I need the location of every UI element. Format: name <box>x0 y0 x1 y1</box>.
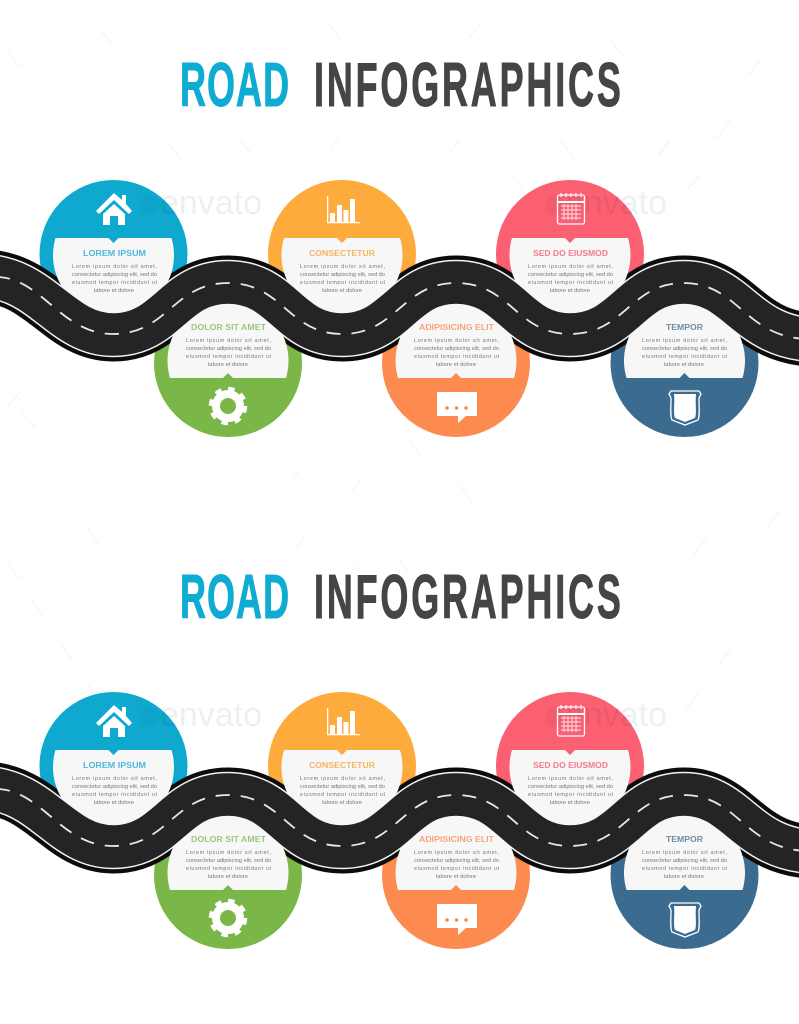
text block: consectetur <box>300 264 386 294</box>
title <box>180 562 621 631</box>
text block: dolor sit amet: Lorem ipsum dolor sit amet, <box>186 850 272 856</box>
text block: adipisicing elit: eiusmod tempor incididunt ut <box>414 866 500 872</box>
panel: consectetur card <box>281 708 402 828</box>
text block: adipisicing elit: eiusmod tempor incididunt ut <box>414 354 500 360</box>
text block: lorem ipsum: Lorem ipsum dolor sit amet, <box>72 776 158 782</box>
watermark: envato <box>160 696 262 734</box>
panel: sed do eiusmod card <box>510 193 630 316</box>
text block: tempor: labore et dolore <box>664 874 704 880</box>
infographic block 2 <box>0 562 799 949</box>
watermark: envato <box>565 184 667 222</box>
watermark: envato <box>160 184 262 222</box>
text block: tempor <box>642 338 728 368</box>
panel: lorem ipsum card <box>53 193 174 316</box>
text block: sed do eiusmod: Lorem ipsum dolor sit amet, <box>528 776 614 782</box>
text block: tempor: Lorem ipsum dolor sit amet, <box>642 850 728 856</box>
icon: gear <box>211 389 245 423</box>
infographic block 1 <box>0 50 799 437</box>
heading: sed do eiusmod: SED DO EIUSMOD <box>533 248 608 258</box>
text block: sed do eiusmod: eiusmod tempor incididunt ut <box>528 280 614 286</box>
text block: lorem ipsum <box>72 264 158 294</box>
title: ROAD <box>180 50 289 119</box>
text block: sed do eiusmod <box>528 776 614 806</box>
title: ROAD <box>180 562 289 631</box>
text block: lorem ipsum: consectetur adipiscing elit, sed do <box>72 784 157 790</box>
text block: consectetur: labore et dolore <box>322 288 362 294</box>
text block: lorem ipsum: Lorem ipsum dolor sit amet, <box>72 264 158 270</box>
text block: sed do eiusmod: consectetur adipiscing elit, sed do <box>528 784 613 790</box>
text block: sed do eiusmod: labore et dolore <box>550 800 590 806</box>
icon: calendar <box>558 193 584 224</box>
text block: sed do eiusmod: eiusmod tempor incididunt ut <box>528 792 614 798</box>
panel: dolor sit amet card <box>167 300 288 423</box>
panel: adipisicing elit card <box>396 812 516 935</box>
heading: dolor sit amet: DOLOR SIT AMET <box>191 322 267 332</box>
text block: tempor: Lorem ipsum dolor sit amet, <box>642 338 728 344</box>
icon: bar chart <box>327 196 360 223</box>
watermark: envato <box>565 696 667 734</box>
icon: house <box>96 193 132 225</box>
road surface <box>0 788 799 852</box>
road surface <box>0 276 799 340</box>
heading: adipisicing elit: ADIPISICING ELIT <box>419 322 495 332</box>
text block: dolor sit amet: labore et dolore <box>208 874 248 880</box>
circle: pink <box>496 692 644 840</box>
text block: tempor: eiusmod tempor incididunt ut <box>642 866 728 872</box>
text block: lorem ipsum: eiusmod tempor incididunt ut <box>72 280 158 286</box>
icon: speech bubble <box>437 392 477 423</box>
watermark <box>140 184 667 222</box>
panel: lorem ipsum card <box>53 705 174 828</box>
watermark <box>140 696 667 734</box>
text block: adipisicing elit: consectetur adipiscing elit, sed do <box>414 858 499 864</box>
text block: tempor: eiusmod tempor incididunt ut <box>642 354 728 360</box>
panel: adipisicing elit card <box>396 300 516 423</box>
panel: dolor sit amet card <box>167 812 288 935</box>
heading: adipisicing elit: ADIPISICING ELIT <box>419 834 495 844</box>
circle: orange <box>268 692 416 840</box>
heading: lorem ipsum: LOREM IPSUM <box>83 760 146 770</box>
icon: gear <box>211 901 245 935</box>
circle: navy <box>610 289 758 437</box>
text block: adipisicing elit <box>414 850 500 880</box>
text block: consectetur: consectetur adipiscing elit, sed do <box>300 784 385 790</box>
text block: adipisicing elit: consectetur adipiscing elit, sed do <box>414 346 499 352</box>
road edges <box>0 788 799 852</box>
text block: consectetur <box>300 776 386 806</box>
text block: sed do eiusmod: consectetur adipiscing elit, sed do <box>528 272 613 278</box>
text block: dolor sit amet <box>186 850 272 880</box>
text block: dolor sit amet: Lorem ipsum dolor sit amet, <box>186 338 272 344</box>
text block: tempor: consectetur adipiscing elit, sed do <box>642 346 727 352</box>
icon: shield <box>669 903 701 937</box>
text block: tempor: labore et dolore <box>664 362 704 368</box>
heading: sed do eiusmod: SED DO EIUSMOD <box>533 760 608 770</box>
circle: orange <box>268 180 416 328</box>
text block: tempor: consectetur adipiscing elit, sed do <box>642 858 727 864</box>
text block: dolor sit amet: consectetur adipiscing elit, sed do <box>186 858 271 864</box>
text block: dolor sit amet <box>186 338 272 368</box>
heading: consectetur: CONSECTETUR <box>309 248 376 258</box>
panel: tempor card <box>624 812 745 937</box>
heading: consectetur: CONSECTETUR <box>309 760 376 770</box>
text block: consectetur: eiusmod tempor incididunt ut <box>300 792 386 798</box>
icon: calendar <box>558 705 584 736</box>
icon: speech bubble <box>437 904 477 935</box>
circle: green <box>154 289 302 437</box>
text block: consectetur: eiusmod tempor incididunt ut <box>300 280 386 286</box>
text block: consectetur: consectetur adipiscing elit, sed do <box>300 272 385 278</box>
heading: lorem ipsum: LOREM IPSUM <box>83 248 146 258</box>
title <box>180 50 621 119</box>
circle: pink <box>496 180 644 328</box>
text block: dolor sit amet: consectetur adipiscing elit, sed do <box>186 346 271 352</box>
text block: lorem ipsum: labore et dolore <box>94 288 134 294</box>
circle: navy <box>610 801 758 949</box>
icon: shield <box>669 391 701 425</box>
text block: consectetur: Lorem ipsum dolor sit amet, <box>300 264 386 270</box>
text block: adipisicing elit: labore et dolore <box>436 362 476 368</box>
panel: consectetur card <box>281 196 402 316</box>
text block: consectetur: Lorem ipsum dolor sit amet, <box>300 776 386 782</box>
circle: light orange <box>382 289 530 437</box>
title: INFOGRAPHICS <box>314 562 621 631</box>
text block: dolor sit amet: eiusmod tempor incididunt ut <box>186 354 272 360</box>
circle: blue <box>40 180 188 328</box>
heading: dolor sit amet: DOLOR SIT AMET <box>191 834 267 844</box>
panel: sed do eiusmod card <box>510 705 630 828</box>
text block: sed do eiusmod <box>528 264 614 294</box>
text block: dolor sit amet: labore et dolore <box>208 362 248 368</box>
text block: lorem ipsum: labore et dolore <box>94 800 134 806</box>
text block: adipisicing elit: Lorem ipsum dolor sit amet, <box>414 850 500 856</box>
road edges <box>0 276 799 340</box>
circle: blue <box>40 692 188 840</box>
icon: house <box>96 705 132 737</box>
text block: sed do eiusmod: Lorem ipsum dolor sit amet, <box>528 264 614 270</box>
panel: tempor card <box>624 300 745 425</box>
text block: lorem ipsum: consectetur adipiscing elit, sed do <box>72 272 157 278</box>
text block: adipisicing elit <box>414 338 500 368</box>
text block: adipisicing elit: Lorem ipsum dolor sit amet, <box>414 338 500 344</box>
text block: sed do eiusmod: labore et dolore <box>550 288 590 294</box>
text block: adipisicing elit: labore et dolore <box>436 874 476 880</box>
text block: lorem ipsum <box>72 776 158 806</box>
text block: dolor sit amet: eiusmod tempor incididunt ut <box>186 866 272 872</box>
text block: tempor <box>642 850 728 880</box>
text block: lorem ipsum: eiusmod tempor incididunt ut <box>72 792 158 798</box>
heading: tempor: TEMPOR <box>666 322 704 332</box>
circle: green <box>154 801 302 949</box>
title: INFOGRAPHICS <box>314 50 621 119</box>
heading: tempor: TEMPOR <box>666 834 704 844</box>
icon: bar chart <box>327 708 360 735</box>
circle: light orange <box>382 801 530 949</box>
text block: consectetur: labore et dolore <box>322 800 362 806</box>
